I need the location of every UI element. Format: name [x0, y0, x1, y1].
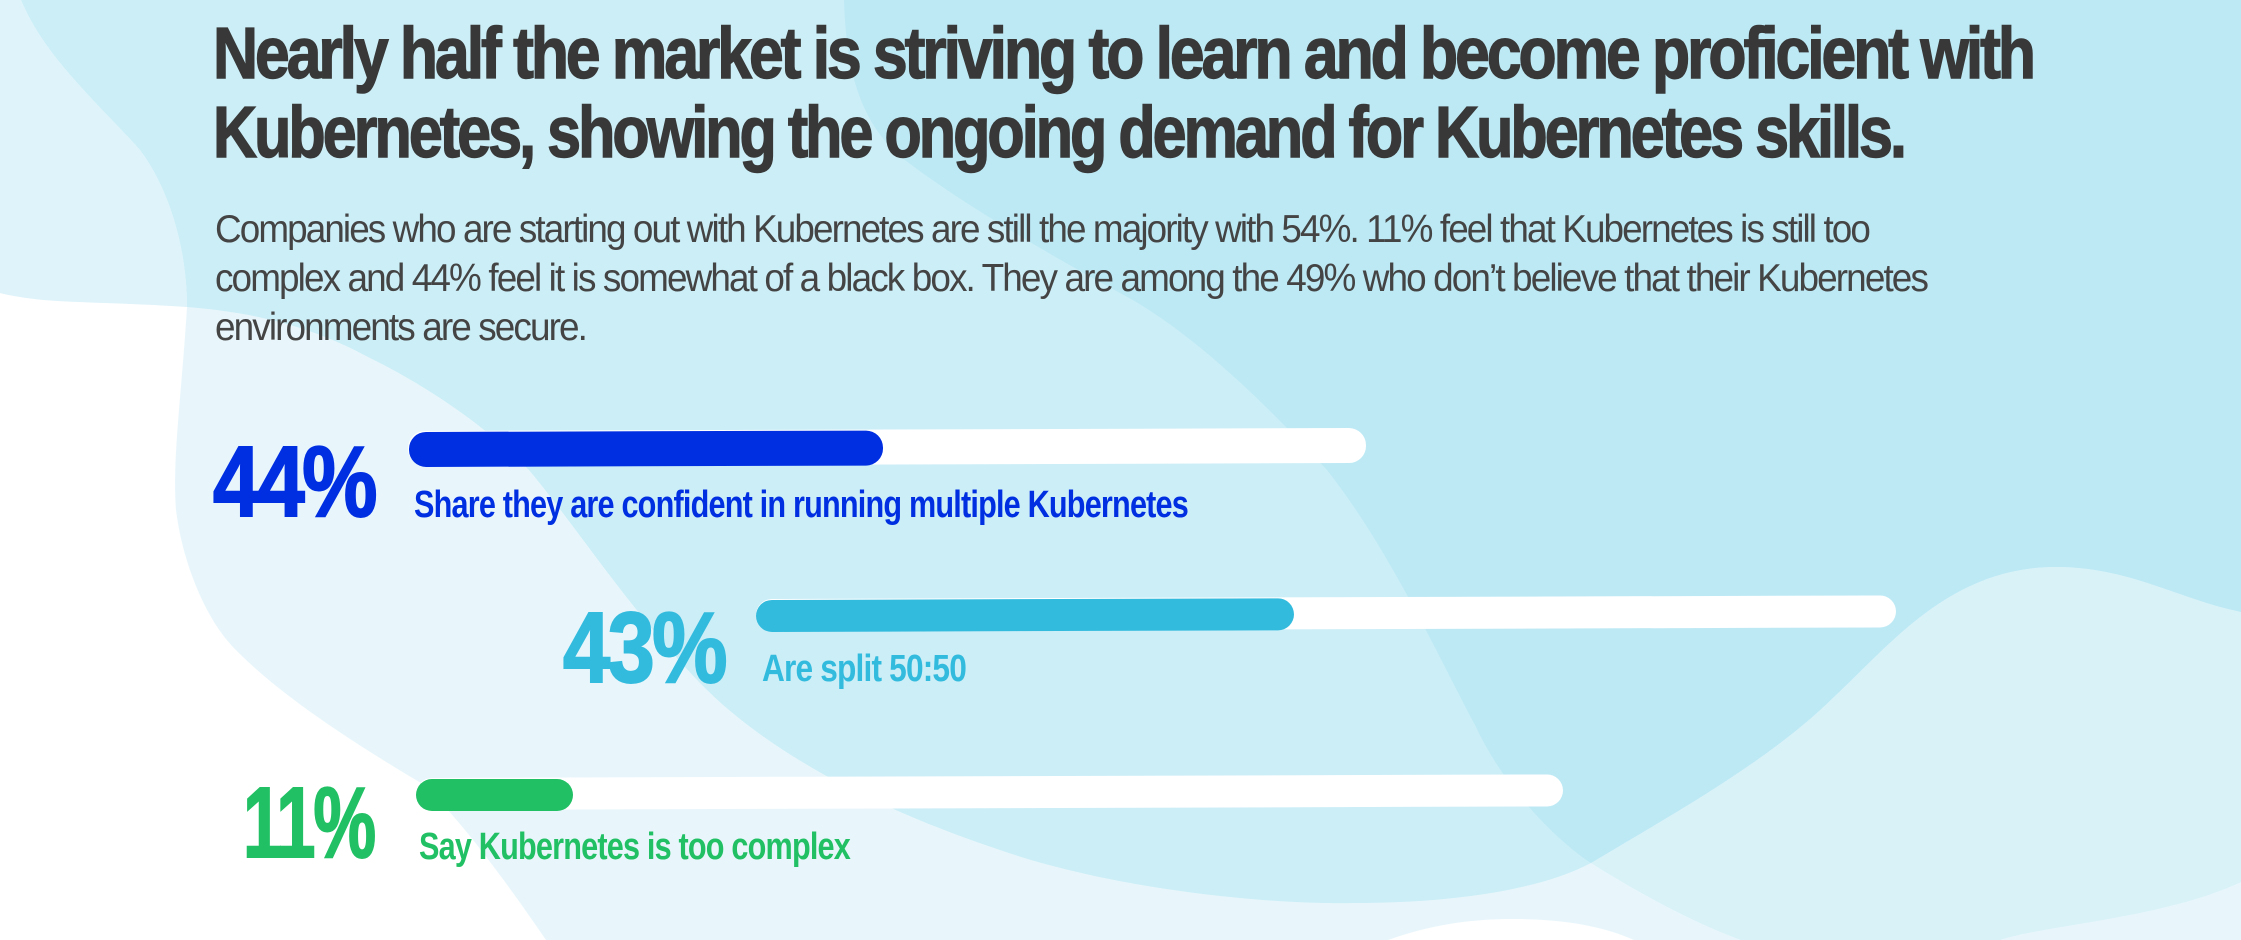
- intro paragraph: complex and 44% feel it is somewhat of a black box. They are among the 49% who don’t believe that their Kubernetes: [215, 257, 1928, 300]
- stat number: 11%: 11%: [243, 767, 375, 879]
- stat row: 44% confident: [213, 426, 1366, 538]
- stat row: 43% split: [563, 592, 1896, 704]
- bar fill: 43%: [756, 598, 1294, 632]
- stat row: 11% too complex: [243, 767, 1563, 879]
- intro paragraph: Companies who are starting out with Kubernetes are still the majority with 54%. 11% feel that Kubernetes is still too: [215, 208, 1870, 251]
- stat number: 43%: 43%: [563, 592, 726, 704]
- title: [213, 14, 2033, 173]
- intro paragraph: [215, 208, 1928, 349]
- bar fill: 11%: [416, 779, 573, 811]
- bar track: 44%: [408, 428, 1366, 466]
- stat number: 44%: 44%: [213, 426, 376, 538]
- bar track: 43%: [756, 595, 1896, 631]
- title: Kubernetes, showing the ongoing demand for Kubernetes skills.: [213, 93, 1904, 173]
- stat label: too complex: Say Kubernetes is too complex: [419, 826, 851, 868]
- bar fill: 44%: [409, 431, 883, 467]
- intro paragraph: environments are secure.: [215, 306, 586, 349]
- stat label: split: Are split 50:50: [762, 648, 966, 690]
- bar track: 11%: [416, 774, 1563, 810]
- stat label: confident: Share they are confident in running multiple Kubernetes: [414, 484, 1188, 526]
